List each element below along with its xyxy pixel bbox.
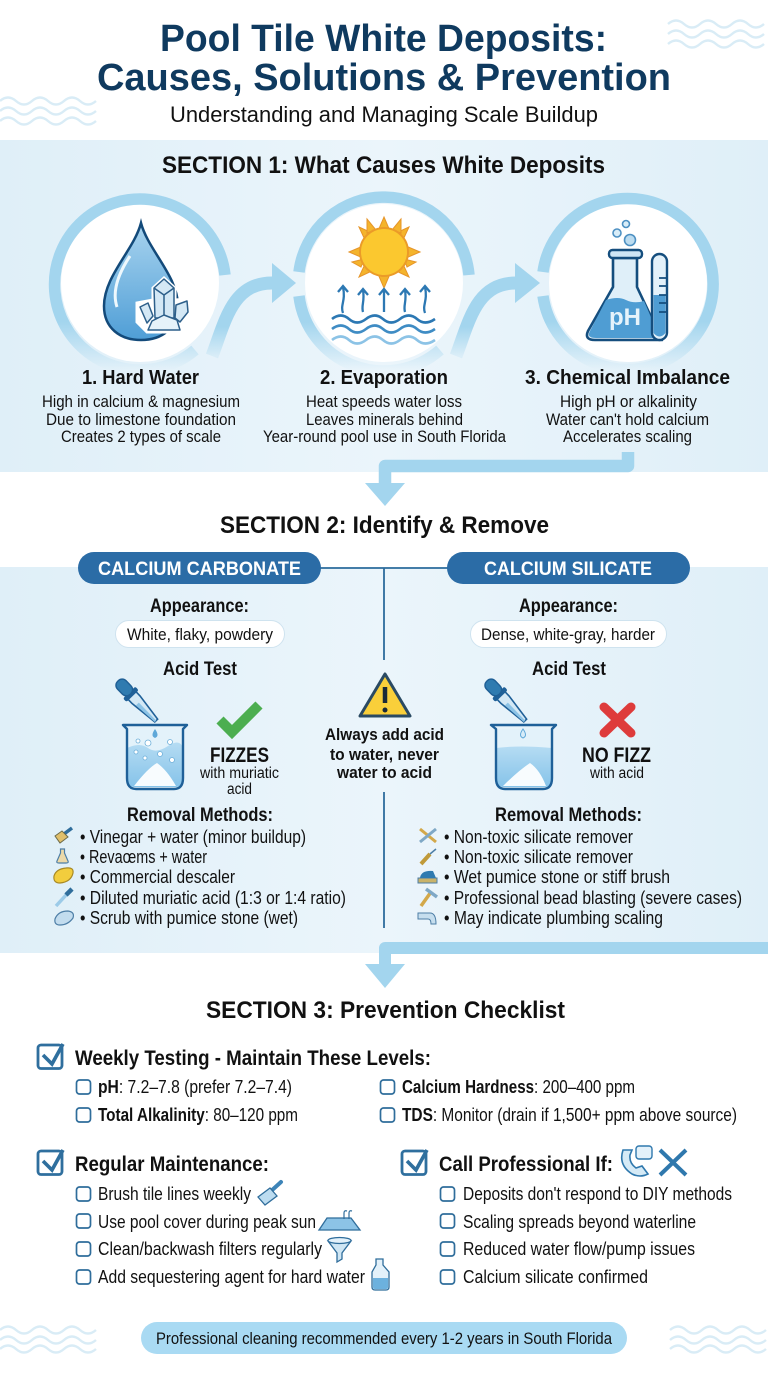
removal list: • Non-toxic silicate remover xyxy=(444,847,633,867)
icon: sun and evaporating water xyxy=(332,217,435,344)
icon: bottle xyxy=(372,1259,389,1290)
title: Causes, Solutions & Prevention xyxy=(97,57,671,99)
checklist: call professional xyxy=(402,1146,732,1287)
appearance label: Appearance: xyxy=(150,596,249,617)
call heading: Call Professional If: xyxy=(439,1152,613,1176)
fizzes result: acid xyxy=(227,781,252,798)
warning text xyxy=(325,725,444,782)
weekly items xyxy=(76,1077,737,1125)
icon: fizzing beaker xyxy=(123,725,187,789)
icon: checked box xyxy=(38,1044,63,1068)
decorative waves: bottom right xyxy=(670,1326,766,1352)
no fizz result: NO FIZZ xyxy=(582,744,651,767)
cause 2 text: Heat speeds water loss xyxy=(306,392,462,411)
warning text: water to acid xyxy=(336,763,432,782)
cause 3 text xyxy=(546,392,709,446)
icon: pool xyxy=(319,1211,360,1230)
checklist: weekly testing xyxy=(38,1044,737,1125)
icon: still beaker xyxy=(491,725,556,789)
icon: green check xyxy=(220,705,259,732)
icon: flask with pH: pH xyxy=(609,304,641,331)
icon ring 1 xyxy=(55,199,225,370)
removal list xyxy=(444,827,742,928)
arrow: section 2 to section 3 xyxy=(365,948,768,988)
cause 2 title: 2. Evaporation xyxy=(320,367,448,389)
title: Pool Tile White Deposits: xyxy=(160,18,607,60)
type pill: CALCIUM SILICATE xyxy=(484,559,652,580)
arrow 2 to 3 xyxy=(456,263,540,356)
icon ring 2 xyxy=(299,197,469,371)
decorative waves: top right xyxy=(668,20,764,48)
cause 2 text: Year-round pool use in South Florida xyxy=(263,427,506,446)
removal list: • Wet pumice stone or stiff brush xyxy=(444,867,670,887)
call items: Deposits don't respond to DIY methods xyxy=(463,1184,732,1204)
type pill xyxy=(78,552,321,584)
removal heading: Removal Methods: xyxy=(127,805,273,826)
no fizz result: with acid xyxy=(589,765,644,782)
removal list: • Revaœms + water xyxy=(80,847,207,867)
section 2 heading: SECTION 2: Identify & Remove xyxy=(220,512,549,539)
warning text: Always add acid xyxy=(325,725,444,744)
maintenance heading: Regular Maintenance: xyxy=(75,1152,269,1176)
icon: water drop with crystals xyxy=(104,223,189,340)
cause 1: hard water xyxy=(42,199,240,446)
decorative waves: bottom left xyxy=(0,1326,96,1352)
checklist: regular maintenance xyxy=(38,1150,389,1290)
maintenance items: Add sequestering agent for hard water xyxy=(98,1267,365,1287)
section 3 heading: SECTION 3: Prevention Checklist xyxy=(206,997,565,1024)
maintenance items xyxy=(76,1184,365,1287)
cause 1 title: 1. Hard Water xyxy=(82,367,199,389)
call items: Reduced water flow/pump issues xyxy=(463,1239,695,1259)
arrow: section 1 to section 2 xyxy=(365,452,628,506)
icon ring 3 xyxy=(543,198,713,370)
removal list: • May indicate plumbing scaling xyxy=(444,908,663,928)
panel: section 2 identify and remove xyxy=(0,552,768,953)
call items: Scaling spreads beyond waterline xyxy=(463,1212,696,1232)
fizzes result: FIZZES xyxy=(210,744,269,767)
icons: removal tools xyxy=(418,829,437,924)
icon: phone and tools xyxy=(622,1146,686,1176)
icon: dropper xyxy=(481,675,531,726)
arrow 1 to 2 xyxy=(212,263,296,356)
fizzes result xyxy=(199,744,279,798)
removal list: • Vinegar + water (minor buildup) xyxy=(80,827,306,847)
cause 3 text: Accelerates scaling xyxy=(563,427,692,446)
acid test label: Acid Test xyxy=(532,659,607,680)
section 1 heading: SECTION 1: What Causes White Deposits xyxy=(162,152,605,179)
type pill: CALCIUM CARBONATE xyxy=(98,559,301,580)
cause 1 text: Creates 2 types of scale xyxy=(61,427,221,446)
acid test label: Acid Test xyxy=(163,659,238,680)
subtitle: Understanding and Managing Scale Buildup xyxy=(170,102,598,127)
no fizz result xyxy=(582,744,651,782)
appearance pill xyxy=(116,620,284,648)
decorative waves: top left xyxy=(0,98,96,124)
icon: dropper xyxy=(112,675,162,726)
icon: flask with pH xyxy=(587,220,667,340)
icon: red x xyxy=(604,707,631,733)
footer banner: Professional cleaning recommended every 1-2 years in South Florida xyxy=(156,1329,612,1348)
cause 2: evaporation xyxy=(263,197,506,446)
fizzes result: with muriatic xyxy=(199,765,279,782)
cause 3 text: Water can't hold calcium xyxy=(546,410,709,429)
appearance label: Appearance: xyxy=(519,596,618,617)
maintenance items: Use pool cover during peak sun xyxy=(98,1212,316,1232)
panel: section 1 causes xyxy=(0,140,768,472)
cause 2 text: Leaves minerals behind xyxy=(306,410,463,429)
cause 3 text: High pH or alkalinity xyxy=(560,392,697,411)
weekly items: Total Alkalinity: 80–120 ppm xyxy=(98,1105,298,1125)
call items: Calcium silicate confirmed xyxy=(463,1267,648,1287)
appearance pill xyxy=(470,620,666,648)
icon: tile brush xyxy=(258,1182,281,1205)
maintenance items: Clean/backwash filters regularly xyxy=(98,1239,322,1259)
icon: funnel xyxy=(328,1238,351,1262)
icons: removal tools xyxy=(54,828,73,925)
cause 3 title: 3. Chemical Imbalance xyxy=(525,367,730,389)
type pill xyxy=(447,552,690,584)
icon: checked box xyxy=(38,1150,63,1174)
weekly heading: Weekly Testing - Maintain These Levels: xyxy=(75,1046,431,1070)
removal list: • Non-toxic silicate remover xyxy=(444,827,633,847)
appearance pill: White, flaky, powdery xyxy=(127,625,273,644)
connector lines xyxy=(320,568,448,928)
removal list: • Scrub with pumice stone (wet) xyxy=(80,908,298,928)
appearance pill: Dense, white-gray, harder xyxy=(481,625,655,644)
column: calcium carbonate xyxy=(54,552,346,928)
cause 3: chemical imbalance xyxy=(525,198,730,446)
cause 2 text xyxy=(263,392,506,446)
icon: warning triangle xyxy=(360,674,410,716)
call items xyxy=(440,1184,732,1287)
footer banner xyxy=(141,1322,627,1354)
removal list: • Diluted muriatic acid (1:3 or 1:4 ratio) xyxy=(80,888,346,908)
weekly items: Calcium Hardness: 200–400 ppm xyxy=(402,1077,635,1097)
weekly items: pH: 7.2–7.8 (prefer 7.2–7.4) xyxy=(98,1077,292,1097)
removal list xyxy=(80,827,346,928)
removal list: • Commercial descaler xyxy=(80,867,235,887)
icon: checked box xyxy=(402,1150,427,1174)
column: calcium silicate xyxy=(418,552,742,928)
maintenance items: Brush tile lines weekly xyxy=(98,1184,251,1204)
cause 1 text: Due to limestone foundation xyxy=(46,410,236,429)
cause 1 text: High in calcium & magnesium xyxy=(42,392,240,411)
warning text: to water, never xyxy=(330,745,439,764)
cause 1 text xyxy=(42,392,240,446)
warning callout xyxy=(325,674,444,782)
removal heading: Removal Methods: xyxy=(495,805,642,826)
title xyxy=(97,18,671,99)
